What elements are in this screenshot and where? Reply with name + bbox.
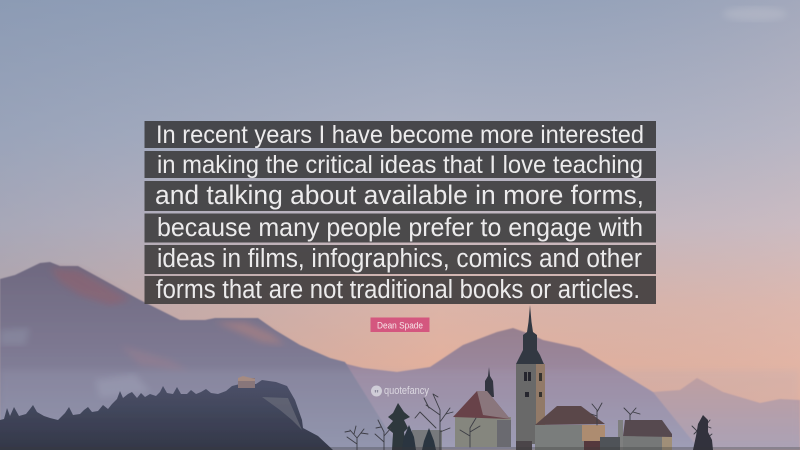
quote panel xyxy=(144,121,656,304)
quote line 4: because many people prefer to engage with xyxy=(157,212,643,242)
bare trees xyxy=(345,394,712,450)
quote line 3: and talking about available in more forms, xyxy=(155,180,644,210)
quote line 5: ideas in films, infographics, comics and other xyxy=(157,245,642,273)
quote line 2: in making the critical ideas that I love teaching xyxy=(157,151,643,179)
conifer xyxy=(387,403,410,450)
icon: quote mark: " xyxy=(374,389,379,400)
author badge xyxy=(370,318,430,332)
left mountain xyxy=(0,262,400,450)
dark small conifers xyxy=(402,425,416,450)
dark conifer xyxy=(422,428,436,450)
far right mountains xyxy=(640,378,800,450)
lower valley haze xyxy=(0,370,800,450)
quote line 6: forms that are not traditional books or articles. xyxy=(156,276,640,304)
central mountain xyxy=(330,328,700,450)
bell tower xyxy=(516,305,545,444)
church buildings right xyxy=(516,406,605,450)
quotefancy logo xyxy=(371,385,429,400)
foreground trees xyxy=(0,394,800,450)
quotefancy logo: quotefancy xyxy=(384,385,429,397)
grey house behind trees xyxy=(412,430,442,450)
dark tree crown xyxy=(693,415,713,450)
author badge: Dean Spade xyxy=(377,320,423,330)
quote line 1: In recent years I have become more interested xyxy=(156,121,644,149)
far right house xyxy=(600,420,672,450)
forest hill with castle xyxy=(0,376,333,450)
small church xyxy=(453,367,511,447)
